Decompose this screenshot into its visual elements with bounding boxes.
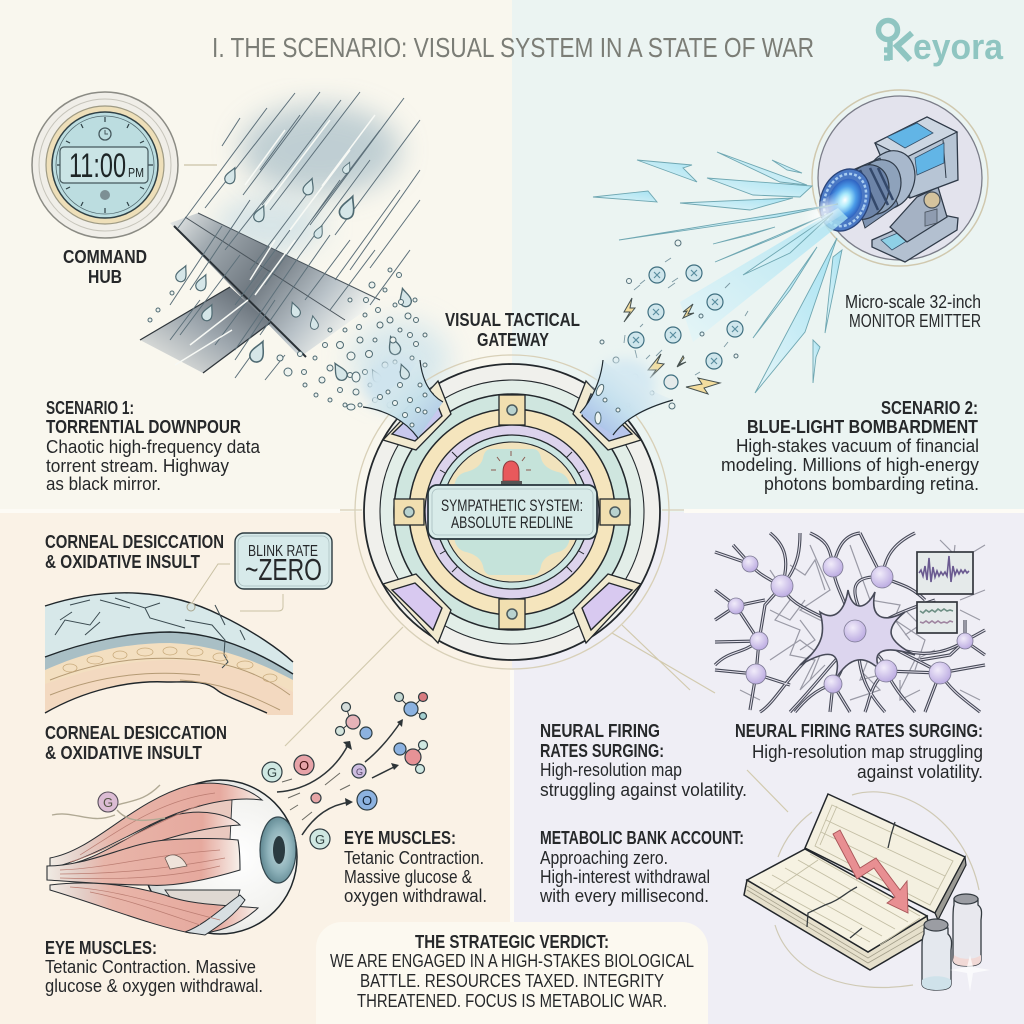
chart: signal trace bottom [917,602,957,633]
illustration: glucose and oxygen molecules: G [356,767,363,777]
heading: visual tactical gateway: VISUAL TACTICAL [445,309,580,330]
callout: blink rate zero [235,533,332,589]
text block: eye muscles center: EYE MUSCLES: [344,827,456,848]
label: monitor emitter [845,292,981,331]
text block: metabolic bank account: METABOLIC BANK ACCOUNT: [540,827,744,848]
panel: strategic verdict: THE STRATEGIC VERDICT: [415,931,609,952]
label: sympathetic system [428,485,597,539]
panel: strategic verdict [316,922,708,1024]
diagram: visual tactical gateway dial [355,355,669,669]
heading: command hub: COMMAND [63,246,147,267]
text block: eye muscles bottom [45,937,263,996]
illustration: eye with muscles [47,780,297,935]
icon: red alarm beacon [491,451,531,485]
icon: command hub clock [32,92,178,238]
text block: corneal heading top: & OXIDATIVE INSULT [45,551,201,572]
label: sympathetic system: SYMPATHETIC SYSTEM: [441,496,583,515]
illustration: eye with muscles: G [103,795,113,810]
text block: eye muscles center: Tetanic Contraction. [344,848,484,868]
panel: strategic verdict: WE ARE ENGAGED IN A HIGH-STAKES BIOLOGICAL [330,951,694,971]
text block: scenario 2: High-stakes vacuum of financial [736,436,979,456]
text block: neural firing left [540,720,747,800]
text block: scenario 1: TORRENTIAL DOWNPOUR [46,416,241,437]
text block: scenario 1 [46,397,261,494]
text block: scenario 1: SCENARIO 1: [46,397,134,418]
illustration: cornea cross section [45,564,293,715]
panel: strategic verdict: BATTLE. RESOURCES TAXED. INTEGRITY [360,971,664,991]
icon: command hub clock: 11:00 [69,147,126,185]
text block: eye muscles center: Massive glucose & [344,867,472,887]
illustration: glucose and oxygen molecules: O [362,793,372,808]
text block: corneal heading top [45,531,224,572]
illustration: glucose and oxygen molecules: G [315,832,325,847]
text block: eye muscles bottom: glucose & oxygen withdrawal. [45,976,263,996]
callout: blink rate zero: ~ZERO [245,552,322,587]
heading: visual tactical gateway: GATEWAY [477,329,550,350]
illustration: glucose and oxygen molecules: O [299,758,309,773]
text block: neural firing left: struggling against volatility. [540,780,747,800]
illustration: glucose and oxygen molecules: G [267,765,277,780]
text block: neural firing right: against volatility. [857,762,983,782]
text block: corneal heading bottom [45,722,227,763]
callout: blink rate zero: BLINK RATE [248,543,318,560]
heading: command hub: HUB [88,266,122,287]
text block: corneal heading top: CORNEAL DESICCATION [45,531,224,552]
text block: scenario 2 [721,397,979,494]
text block: eye muscles center [344,827,487,906]
icon: command hub clock: PM [128,165,144,180]
text block: eye muscles center: oxygen withdrawal. [344,886,487,906]
illustration: glucose and oxygen molecules [262,692,428,849]
connector: clock to rain [184,164,217,166]
icons: photons and lightning bolts [600,240,748,409]
text block: neural firing left: High-resolution map [540,760,682,780]
text block: metabolic bank account [539,827,744,906]
text block: neural firing left: RATES SURGING: [540,740,664,761]
text block: scenario 2: BLUE-LIGHT BOMBARDMENT [747,416,979,437]
text block: scenario 1: as black mirror. [46,474,161,494]
illustration: data stream funnels into gateway [347,359,673,438]
illustration: monitor emitter [811,90,988,266]
text block: metabolic bank account: High-interest withdrawal [540,867,710,887]
text block: scenario 1: Chaotic high-frequency data [46,437,261,457]
illustration: torrential rain and wet highway [140,92,450,408]
leader lines: gateway to lower panels [285,625,788,812]
title: I. THE SCENARIO: VISUAL SYSTEM IN A STATE OF WAR [212,32,814,63]
illustration: cracked ledger and vials [744,792,990,992]
text block: scenario 2: modeling. Millions of high-energy [721,455,979,475]
label: sympathetic system: ABSOLUTE REDLINE [451,513,573,532]
heading: command hub [63,246,147,287]
label: monitor emitter: Micro-scale 32-inch [845,292,981,312]
illustration: neural network [715,533,985,712]
chart: signal trace top [917,552,973,594]
text block: neural firing left: NEURAL FIRING [540,720,660,741]
panel: strategic verdict: THREATENED. FOCUS IS METABOLIC WAR. [357,991,667,1011]
text block: neural firing right: High-resolution map struggling [752,742,983,762]
label: monitor emitter: MONITOR EMITTER [849,311,981,331]
heading: visual tactical gateway [445,309,580,350]
text block: eye muscles bottom: Tetanic Contraction. Massive [45,957,256,977]
text block: scenario 2: photons bombarding retina. [764,474,979,494]
text block: corneal heading bottom: CORNEAL DESICCATION [45,722,227,743]
text block: metabolic bank account: Approaching zero. [540,848,668,868]
logo: Keyora [878,20,1004,67]
text block: corneal heading bottom: & OXIDATIVE INSULT [45,742,203,763]
text block: metabolic bank account: with every millisecond. [539,886,709,906]
text block: neural firing right [735,720,983,782]
logo: Keyora: eyora [913,26,1004,67]
text block: scenario 1: torrent stream. Highway [46,456,229,476]
text block: eye muscles bottom: EYE MUSCLES: [45,937,157,958]
illustration: blue light beams [593,152,848,393]
text block: scenario 2: SCENARIO 2: [881,397,978,418]
